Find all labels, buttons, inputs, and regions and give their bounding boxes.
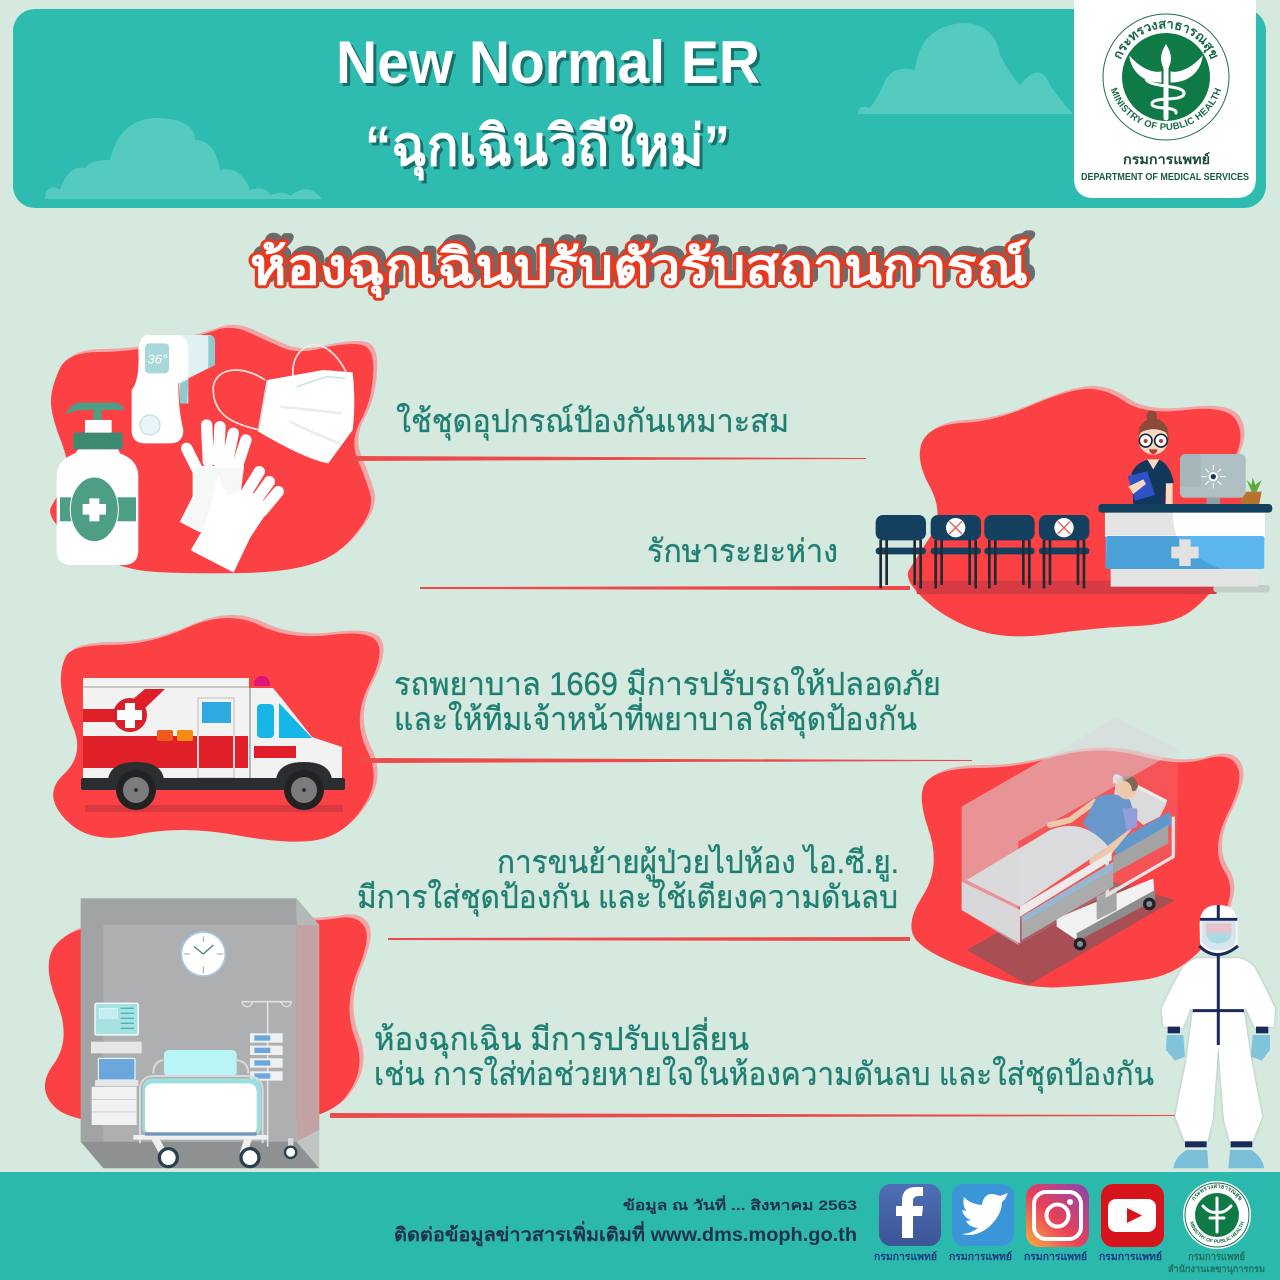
icon: infrared thermometer (132, 335, 215, 443)
blob: patient transfer (911, 748, 1243, 987)
icon: blanket (962, 826, 1113, 943)
icon: rear wheel (116, 770, 156, 810)
label: twitter: กรมการแพทย์ (949, 1251, 1012, 1263)
icon: waiting chairs (876, 515, 1089, 588)
subtitle: “ฉุกเฉินวิถีใหม่” (365, 113, 730, 181)
text: distancing: รักษาระยะห่าง (647, 533, 838, 569)
logo panel (1074, 0, 1256, 198)
footer date text: ข้อมูล ณ วันที่ ... สิงหาคม 2563 (623, 1195, 857, 1214)
main heading: ห้องฉุกเฉินปรับตัวรับสถานการณ์ (250, 239, 1028, 298)
title: New Normal ER (336, 29, 760, 96)
cloud: left (45, 118, 322, 199)
icon: facebook (879, 1184, 941, 1246)
seal ring text: Thai: กระทรวงสาธารณสุข (1115, 20, 1218, 60)
text: ambulance line 1: รถพยาบาล 1669 มีการปรับรถให้ปลอดภัย (394, 666, 941, 702)
line: ambulance (362, 758, 972, 763)
chair 4 (1039, 515, 1089, 588)
icon: instagram (1026, 1184, 1089, 1247)
icon: siren (254, 676, 270, 686)
text: transfer line 1: การขนย้ายผู้ป่วยไปห้อง ไอ.ซี.ยู. (497, 844, 899, 882)
icon: patient (1050, 775, 1138, 862)
illustration: isolation bed (962, 717, 1178, 985)
line: transfer (388, 937, 910, 941)
line: distancing (420, 586, 910, 590)
icon: monitors and drawers (91, 1003, 142, 1125)
icon: gloves (181, 425, 278, 572)
line: emergency room (330, 1113, 1175, 1118)
icon: mattress (1113, 776, 1172, 873)
footer seal (1183, 1181, 1251, 1249)
text: transfer line 2: มีการใส่ชุดป้องกัน และใช้เตียงความดันลบ (357, 879, 898, 917)
footer bar (0, 1172, 1280, 1280)
label: facebook: กรมการแพทย์ (874, 1251, 937, 1263)
logo label: English: DEPARTMENT OF MEDICAL SERVICES (1081, 172, 1249, 183)
text: emergency room line 1: ห้องฉุกเฉิน มีการปรับเปลี่ยน (374, 1017, 749, 1059)
footer seal ring text: English: MINISTRY OF PUBLIC HEALTH (1190, 1221, 1244, 1243)
blob: protective equipment (50, 325, 377, 573)
icon: bed frame (1057, 817, 1173, 950)
illustration: reception and chairs (876, 411, 1272, 594)
chair 1 (876, 515, 926, 588)
illustration: ambulance (81, 676, 345, 812)
header banner (13, 9, 1266, 208)
footer seal label 1: กรมการแพทย์ (1188, 1251, 1245, 1263)
seal ring text: English: MINISTRY OF PUBLIC HEALTH (1110, 88, 1221, 130)
blob: emergency room (45, 914, 371, 1128)
chair 2 (931, 515, 981, 588)
text: equipment: ใช้ชุดอุปกรณ์ป้องกันเหมาะสม (396, 403, 789, 441)
illustration: negative pressure room (81, 898, 319, 1168)
blob: distancing (908, 386, 1254, 636)
icon: reception desk (1098, 504, 1272, 587)
icon: hospital bed (133, 1050, 296, 1167)
icon: clock (181, 932, 225, 976)
figure: worker in PPE suit (1162, 905, 1275, 1168)
icon: isolation canopy (962, 717, 1178, 945)
icon: youtube (1101, 1184, 1164, 1247)
icon: nurse (1128, 411, 1174, 504)
cloud: right (858, 23, 1073, 114)
icon: front wheel (284, 770, 324, 810)
icon: potted plant (1240, 477, 1262, 504)
icon: computer monitor (1180, 454, 1246, 504)
icon: hand sanitizer (57, 403, 138, 565)
icon: twitter (952, 1184, 1014, 1246)
icon: face mask (213, 345, 354, 463)
chair 3 (984, 515, 1035, 588)
label: instagram: กรมการแพทย์ (1024, 1251, 1087, 1263)
footer seal label 2: สำนักงานเลขานุการกรม (1168, 1264, 1265, 1275)
line: equipment (352, 456, 866, 461)
icon: red cross emblem (113, 698, 147, 732)
footer seal ring text: Thai: กระทรวงสาธารณสุข (1192, 1184, 1242, 1201)
label: youtube: กรมการแพทย์ (1099, 1251, 1162, 1263)
footer contact text: ติดต่อข้อมูลข่าวสารเพิ่มเติมที่ www.dms.moph.go.th (394, 1221, 857, 1247)
blob: ambulance (53, 615, 384, 842)
text: emergency room line 2: เช่น การใส่ท่อช่วยหายใจในห้องความดันลบ และใส่ชุดป้องกัน (374, 1056, 1154, 1094)
icon: infrared thermometer: 36° (147, 351, 168, 366)
text: ambulance line 2: และให้ทีมเจ้าหน้าที่พยาบาลใส่ชุดป้องกัน (394, 697, 917, 739)
illustration: protective equipment (57, 335, 354, 572)
emblem: caduceus (1130, 45, 1202, 118)
icon: IV pole and pumps (242, 1002, 292, 1147)
logo label: Thai: กรมการแพทย์ (1123, 152, 1210, 167)
